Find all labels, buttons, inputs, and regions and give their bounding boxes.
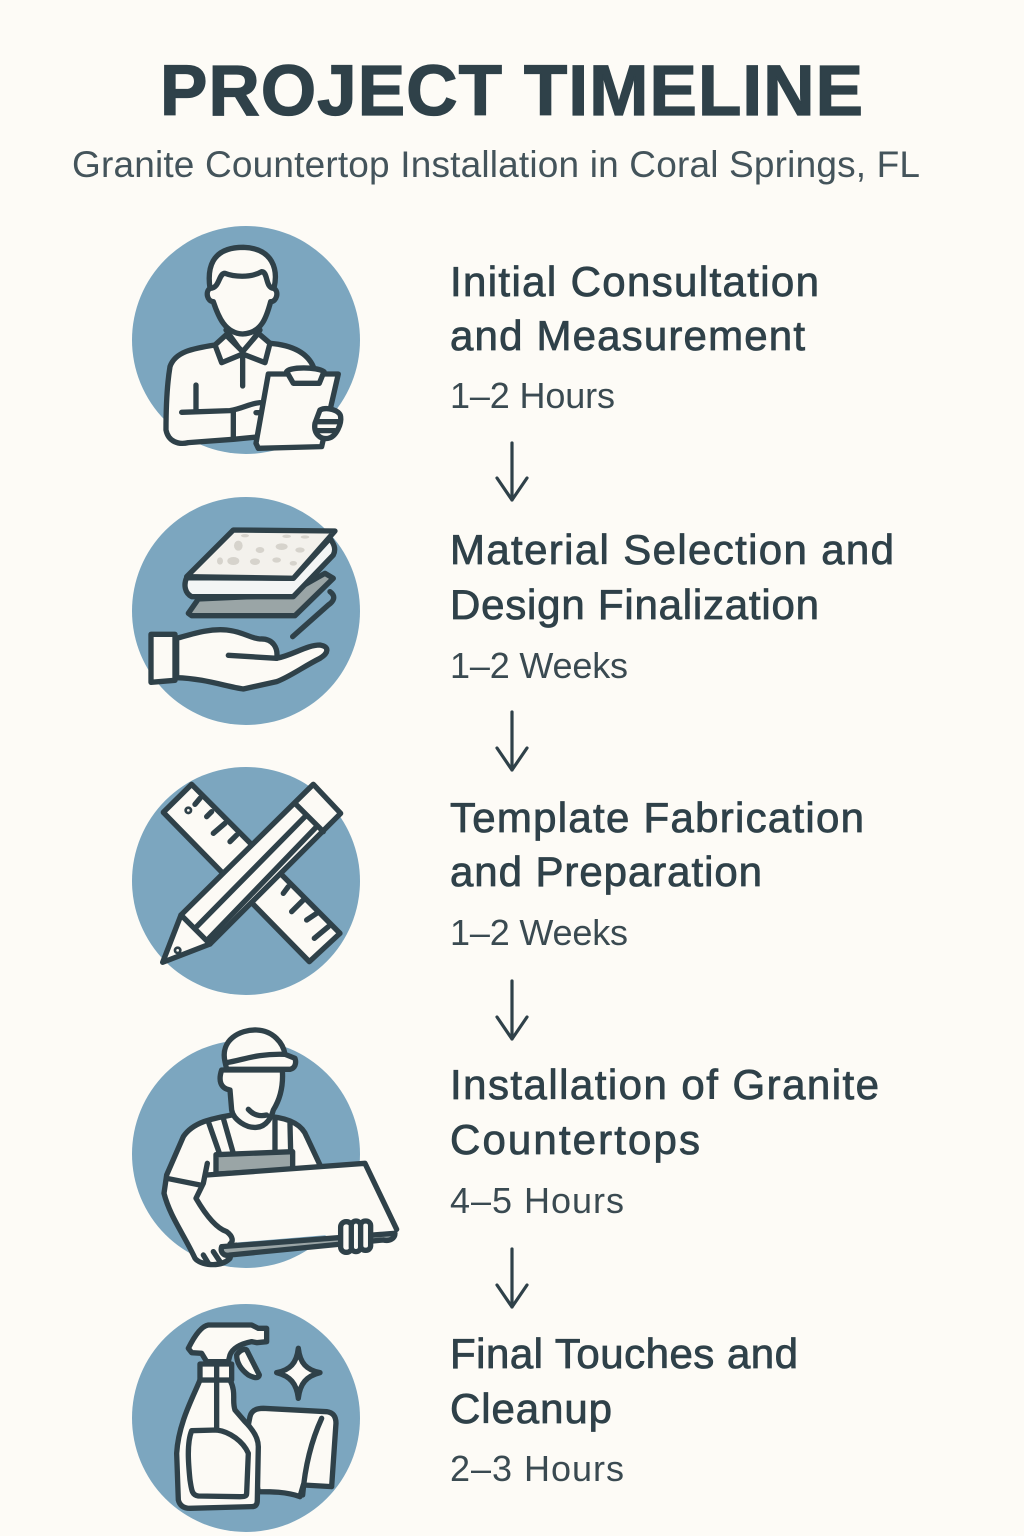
panel: step 3 template fabrication (132, 767, 864, 995)
heading: step 3: Template Fabrication (450, 794, 864, 841)
heading: step 3 (450, 794, 864, 895)
panel: step 5 final touches (132, 1304, 798, 1532)
heading: step 5: Final Touches and (450, 1330, 798, 1377)
icon: crossed ruler and pencil (132, 767, 360, 995)
duration: step 4: 4–5 Hours (450, 1180, 624, 1221)
heading: step 4: Installation of Granite (450, 1061, 879, 1108)
duration: step 3: 1–2 Weeks (450, 912, 628, 953)
title: PROJECT TIMELINE (160, 52, 863, 131)
duration: step 1: 1–2 Hours (450, 375, 615, 416)
heading: step 4 (450, 1061, 879, 1163)
heading: step 1 (450, 258, 819, 359)
subtitle: Granite Countertop Installation in Coral Springs, FL (72, 144, 920, 185)
duration: step 2: 1–2 Weeks (450, 645, 628, 686)
panel: step 2 material selection (132, 497, 894, 725)
heading: step 2: Design Finalization (450, 581, 819, 628)
heading: step 5: Cleanup (450, 1385, 612, 1432)
heading: step 2: Material Selection and (450, 526, 894, 573)
arrow: step 4 to 5 (497, 1249, 527, 1307)
heading: step 5 (450, 1330, 798, 1432)
heading: step 2 (450, 526, 894, 628)
icon: worker carrying countertop (132, 1030, 397, 1268)
panel: step 4 installation (132, 1030, 879, 1268)
arrow: step 3 to 4 (497, 981, 527, 1039)
heading: step 1: Initial Consultation (450, 258, 819, 305)
heading: step 3: and Preparation (450, 848, 762, 895)
arrow: step 1 to 2 (497, 443, 527, 500)
panel: step 1 initial consultation (132, 226, 819, 454)
duration: step 5: 2–3 Hours (450, 1448, 624, 1489)
icon: man with clipboard (132, 226, 360, 454)
heading: step 4: Countertops (450, 1116, 700, 1163)
icon: granite slabs over hand (132, 497, 360, 725)
icon: spray bottle, cloth and sparkle (132, 1304, 360, 1532)
heading: step 1: and Measurement (450, 312, 805, 359)
arrow: step 2 to 3 (497, 712, 527, 770)
